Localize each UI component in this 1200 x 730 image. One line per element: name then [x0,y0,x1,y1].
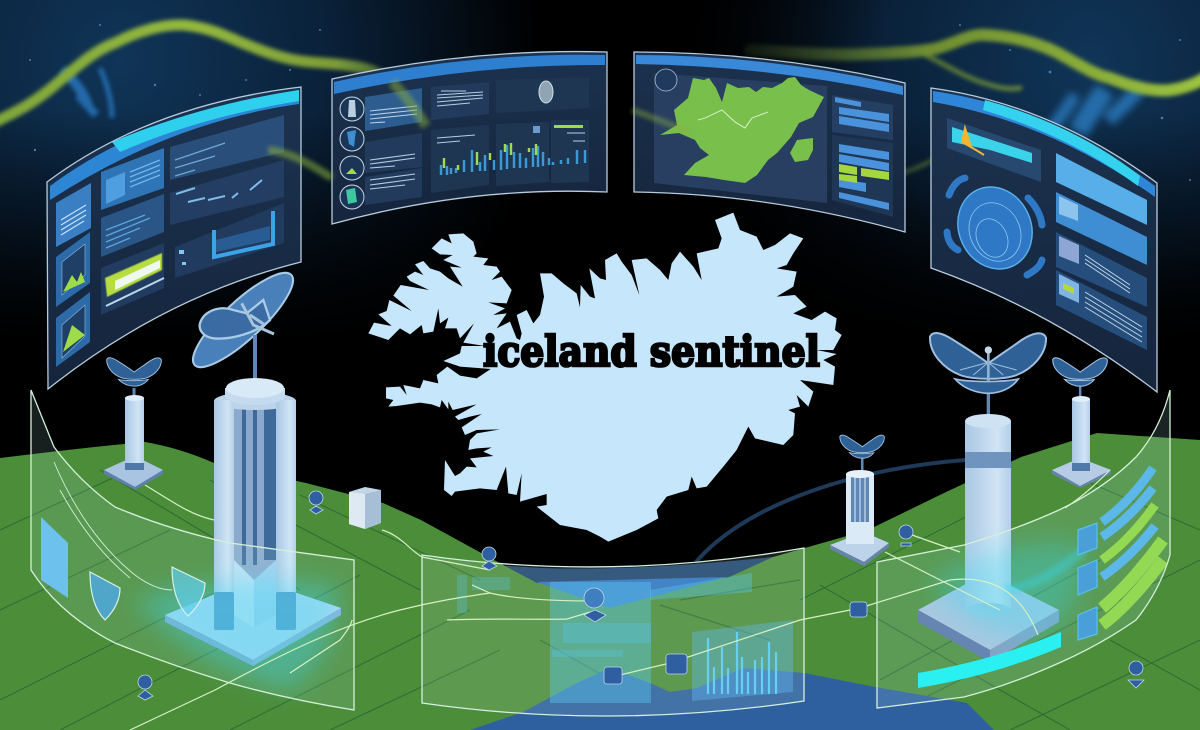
route line [698,110,768,128]
panel: radar dashboard [931,88,1157,392]
header strip [334,55,605,94]
card grid [101,115,284,315]
mini globe [655,69,677,91]
aurora: left green band [0,25,415,122]
cyan bar [918,632,1061,688]
square [533,126,540,133]
water: central bay [470,557,994,730]
icon circles [340,97,364,209]
dish: small left satellite [107,358,161,386]
panel: lower-right glass [877,390,1170,708]
info cards [1056,153,1147,350]
globe icon [539,81,553,103]
cyan glow [930,542,1081,640]
aurora: left blue wisp [62,68,112,118]
aurora: right blue wisp [1050,88,1140,132]
header strip [933,91,1155,197]
dark arc behind mid tower [696,460,965,562]
bar chart [441,143,585,175]
water: bay top shadow [505,557,773,583]
panel: far-left dashboard [47,87,301,389]
map card [654,73,827,203]
panel: map dashboard [634,52,905,232]
icon cards [1078,523,1097,640]
tower: large right [918,414,1059,662]
lime status card [105,253,164,306]
dish: mid satellite [840,435,884,472]
shield icon: tower [172,567,205,616]
panel: centre glass [422,548,804,716]
radar dial [945,175,1045,281]
title: iceland sentinel [483,327,820,376]
header strip [50,90,299,200]
card column [56,183,91,367]
main map: Iceland silhouette [368,213,842,542]
ground: green landscape [0,433,1200,730]
green small island [790,138,813,162]
header strip [636,55,903,95]
data blocks [457,573,752,703]
tower: large left [165,378,341,666]
dish: small right satellite [1053,358,1107,398]
aurora overlay on upper-left panel [392,82,426,126]
side cards [832,95,893,217]
water: blue inlet [537,577,727,608]
stripes [1102,468,1163,625]
panel: lower-left glass [31,390,354,710]
water: lower sea [470,668,994,730]
aurora: right green band [750,35,1200,175]
dish: large right satellite [930,333,1046,422]
cyan beam [1005,548,1085,590]
cards [365,77,589,205]
panel: upper-left dashboard [332,52,607,224]
aurora overlay on far-left panel [268,150,332,178]
tower: small left [104,388,163,490]
text lines [370,91,585,189]
tower: small right [1052,396,1111,488]
bar chart [692,620,793,701]
shield icon: centre-left [90,572,120,620]
connector lines [130,470,1110,730]
green island map [660,77,824,183]
lime tag [554,125,583,128]
marker icons [138,491,1144,700]
aurora overlay on map panel [632,110,690,132]
box: ground sensor unit [349,487,381,529]
cyan glow [135,580,337,690]
droplet card [41,517,68,598]
dish: large left satellite [182,261,304,387]
terrain card [947,118,1041,182]
tower: mid [830,470,889,566]
